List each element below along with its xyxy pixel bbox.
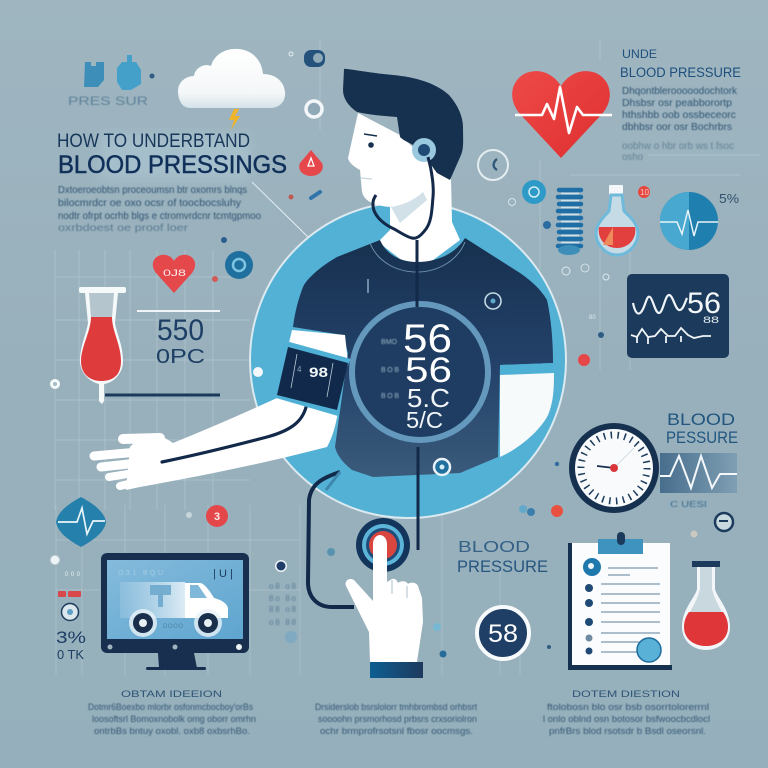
- badge 58: [477, 607, 529, 659]
- figure: hair: [343, 69, 463, 180]
- icon: red number dot: 3: [214, 511, 220, 523]
- title: BLOOD PRESSINGS: [58, 151, 287, 179]
- right blood pressure label: BLOOD: [667, 410, 735, 429]
- scattered marks bottom centre: o8 88: [269, 618, 297, 627]
- intro text block: [58, 184, 261, 234]
- intro text block: bilocmrdcr oe oxo ocsr of toocbocsluhy: [58, 197, 242, 209]
- pointer line: [252, 182, 308, 237]
- scattered marks bottom centre: o8 o8: [269, 582, 297, 591]
- left column stats: 000: [65, 572, 81, 578]
- caption right: ftolobosn blo osr bsb osorrtolorerrnl: [547, 702, 709, 713]
- title: [57, 131, 287, 179]
- icon: large blood flask: [682, 561, 730, 650]
- icon: cloud with lightning: [178, 49, 285, 130]
- intro text block: Dxtoeroeobtsn proceoumsn btr oxomrs blnqs: [58, 184, 247, 196]
- scattered marks right of figure: 80: [589, 315, 596, 321]
- badge 58: 58: [488, 620, 518, 648]
- title: HOW TO UNDERBTAND: [57, 131, 250, 152]
- icon: blue pulse badge: [56, 497, 106, 547]
- intro text block: oxrbdoest oe proof loer: [58, 222, 189, 234]
- caption centre: [315, 702, 477, 737]
- icon: small blood flask: [596, 185, 638, 255]
- caption right: l onlo oblnd osn botosor bsfwoocbcdlocl: [543, 714, 710, 725]
- right blood pressure label: PESSURE: [666, 428, 738, 447]
- top-right heading and text: osho: [622, 152, 643, 163]
- caption left: OBTAM IDEEION: [121, 689, 222, 700]
- top-right heading and text: UNDE: [622, 47, 657, 61]
- hand: [346, 535, 423, 662]
- caption centre: ochr brmprofrsotsnl fbosr oocmsgs.: [320, 726, 473, 737]
- caption left: loosoftsrl Bomoxnobolk omg oborr omrhn: [92, 714, 256, 725]
- top-right heading and text: dbhbsr oor osr Bochrbrs: [622, 122, 732, 133]
- caption left: ontrbBs bntuy oxobl. oxb8 oxbsrhBo.: [94, 726, 250, 737]
- blood pressure label centre: PRESSURE: [457, 557, 548, 576]
- caption left: Dotmr6Boexbo mlorbr osfonmcbocboy'orBs: [88, 702, 253, 713]
- icon: gauge dial: [569, 423, 659, 513]
- caption right: DOTEM DIESTION: [572, 689, 680, 700]
- intro text block: nodtr ofrpt ocrhb blgs e ctromvrdcnr tcmtgpmoo: [58, 210, 261, 222]
- icon: red heart with pulse: [512, 71, 612, 158]
- scattered marks bottom centre: [269, 462, 563, 658]
- small red tag: [638, 186, 650, 198]
- top-right heading and text: oobhw o hbr orb ws t fsoc: [622, 141, 734, 152]
- figure: forearm and hand: [94, 398, 338, 490]
- figure: left sleeve: [288, 330, 348, 363]
- left column stats: [50, 556, 86, 662]
- top-left mini icons: [68, 55, 154, 108]
- icon: monitor with van: O31 BQU: [118, 570, 163, 577]
- blood pressure label centre: BLOOD: [458, 539, 530, 556]
- button: [356, 518, 410, 572]
- icons: top-centre accents: [288, 50, 551, 229]
- figure: chest gauge: [352, 304, 488, 440]
- figure: shirt: [293, 238, 553, 477]
- hand cuff: [370, 662, 423, 678]
- scattered marks bottom centre: 8o 8o: [269, 594, 297, 603]
- right blood pressure label: C UESI: [670, 500, 707, 509]
- top-right heading and text: Dhqontblerooooodochtork: [622, 86, 738, 97]
- icon: blue pulse circle: [660, 191, 739, 250]
- figure: cuff: [276, 341, 351, 416]
- caption left: [88, 689, 256, 737]
- figure: chest gauge: 56: [405, 351, 452, 390]
- left column stats: 3%: [56, 628, 86, 647]
- right blood pressure label: [666, 410, 738, 509]
- icon: hand pressing button: [346, 518, 423, 678]
- icon: blue badge: [212, 237, 253, 282]
- small red tag: 10: [640, 188, 649, 197]
- icon: blue pulse circle: 5%: [719, 191, 739, 206]
- scattered marks bottom centre: 88 o8: [269, 605, 297, 614]
- top-left mini icons: PRES SUR: [68, 94, 148, 108]
- reading 550 0PC: [137, 311, 220, 368]
- figure: right sleeve band and arm: [500, 363, 554, 457]
- top-right heading and text: BLOOD PRESSURE: [620, 65, 741, 80]
- figure: stethoscope: [308, 138, 436, 607]
- figure: arm tube: [162, 403, 307, 462]
- readout monitor panel: 56: [687, 287, 721, 320]
- top-right heading and text: [620, 47, 741, 163]
- small navy ring icon: [690, 513, 733, 538]
- figure: chest gauge: BOB: [381, 393, 399, 400]
- figure: chest gauge: 56: [403, 317, 452, 361]
- figure: neck shadow: [391, 192, 427, 223]
- figure: cuff: 4: [297, 365, 302, 374]
- figure: chest gauge: 5/C: [406, 407, 443, 433]
- icon: test tube with blood: [79, 287, 126, 404]
- figure: chest gauge: 5.C: [407, 383, 450, 413]
- icon: small heart with reading: 0J8: [163, 268, 186, 278]
- caption centre: soooohn prsmorhosd prbsrs crxsoriolron: [318, 714, 477, 725]
- figure: face details: [361, 134, 377, 179]
- caption centre: Drsiderslob bsrslolorr tmhbrombsd orhbsrt: [315, 702, 477, 713]
- icon: small heart with reading: [153, 255, 195, 293]
- figure: person with blood pressure cuff: [94, 69, 554, 607]
- caption right: pnfrBrs blod rsotsdr b Bsdl oseorsnl.: [549, 726, 706, 737]
- icon: monitor with van: |U|: [213, 568, 233, 580]
- caption right: [543, 689, 710, 737]
- central blue circle: [250, 202, 566, 518]
- top-right heading and text: Dhsbsr osr peabborortp: [622, 98, 732, 109]
- readout monitor panel: [627, 274, 729, 358]
- icon: monitor with van: [101, 553, 249, 670]
- icon: red number dot: [186, 505, 228, 527]
- reading 550 0PC: 0PC: [156, 346, 205, 368]
- figure: shirt badges: [368, 279, 501, 475]
- scattered marks right of figure: [562, 264, 609, 366]
- icon: pulse band: [660, 453, 737, 493]
- figure: chest gauge: BMO: [381, 339, 398, 346]
- icon: spring stack: [558, 190, 581, 255]
- left column stats: 0 TK: [57, 647, 84, 662]
- blood pressure label centre: [457, 539, 548, 576]
- top-right heading and text: hthshbb oob ossbeceorc: [622, 110, 736, 121]
- figure: chest gauge: BOB: [381, 367, 399, 374]
- figure: cuff: 98: [309, 364, 328, 380]
- figure: neck and face: [348, 113, 460, 272]
- icon: clipboard checklist: [568, 532, 672, 670]
- icon: monitor with van: DOOO: [163, 624, 183, 630]
- readout monitor panel: 88: [703, 315, 719, 325]
- connector lines to cuff: [50, 367, 263, 395]
- reading 550 0PC: 550: [157, 314, 204, 347]
